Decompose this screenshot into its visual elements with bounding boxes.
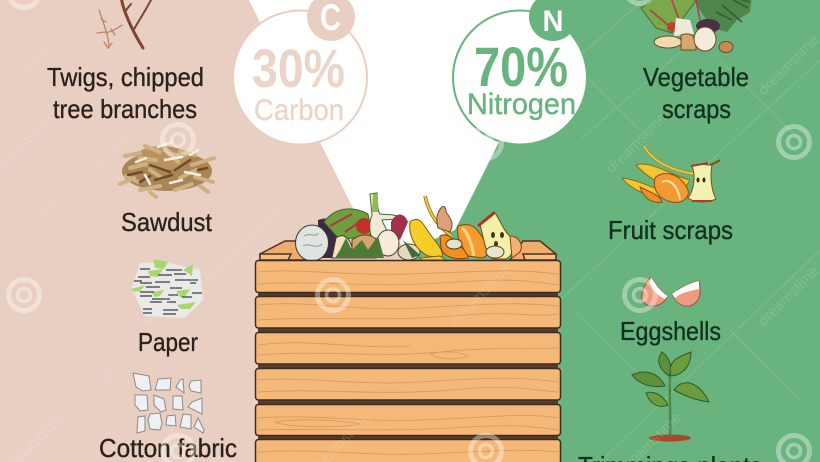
circle: carbon ring: [233, 10, 367, 144]
bin back lid corners: [260, 241, 556, 260]
circle: nitrogen ring: [453, 10, 587, 144]
bin wooden slats: [256, 260, 560, 462]
circle: carbon symbol: [307, 0, 355, 41]
carbon badge: 30%: [233, 0, 367, 144]
label: fruit scraps: Fruit scraps: [608, 215, 733, 245]
label: twigs: tree branches: [53, 94, 197, 124]
label: sawdust: Sawdust: [121, 207, 213, 237]
compost food pile: [296, 193, 521, 261]
icon: eggshells: [642, 277, 700, 306]
watermark text: dreamstime: [139, 261, 206, 329]
label: twigs: Twigs, chipped: [47, 62, 204, 92]
label: paper: Paper: [138, 327, 198, 357]
icon: paper: [131, 259, 203, 318]
panel: nitrogen background: [410, 0, 820, 462]
panel: carbon background: [0, 0, 410, 462]
icon: fruit scraps: [622, 146, 720, 202]
circle: nitrogen symbol: [529, 0, 577, 41]
value: 30%: 30%: [252, 39, 345, 99]
value: 70%: 70%: [474, 35, 568, 98]
label: Carbon: Carbon: [254, 94, 344, 127]
compost bin: [256, 193, 560, 462]
icon: twigs: [97, 0, 152, 48]
label: vegetable scraps: scraps: [662, 94, 731, 124]
icon: seedling: [632, 352, 709, 442]
label: Nitrogen: Nitrogen: [467, 88, 576, 121]
nitrogen badge: 70%: [453, 0, 587, 144]
circle: nitrogen symbol: N: [542, 5, 564, 38]
label: eggshells: Eggshells: [620, 316, 721, 346]
label: vegetable scraps: [643, 62, 749, 124]
icon: cotton fabric pieces: [133, 373, 204, 433]
icon: sawdust: [120, 142, 214, 197]
watermark text: dreamstime: [603, 109, 670, 177]
watermark text: dreamstime: [447, 261, 514, 329]
label: twigs: [47, 62, 204, 124]
icon: vegetable scraps: [641, 0, 752, 52]
label: vegetable scraps: Vegetable: [643, 62, 749, 92]
